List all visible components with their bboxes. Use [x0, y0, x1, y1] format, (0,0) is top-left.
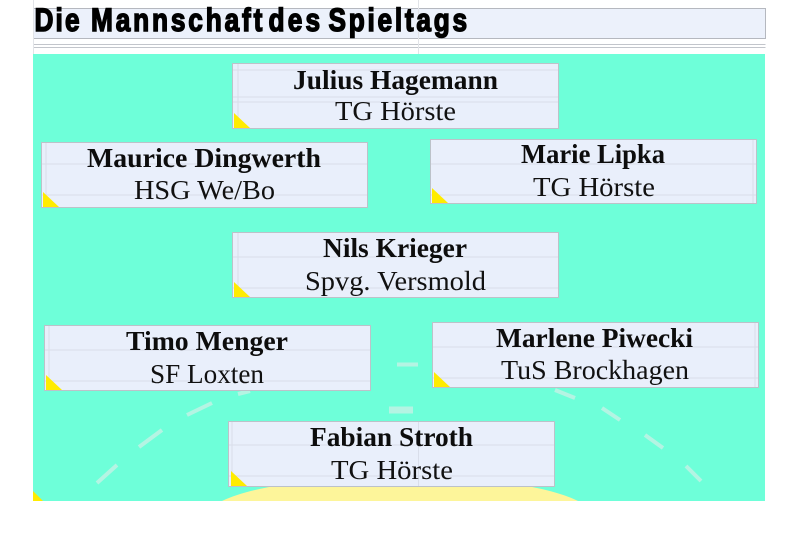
player card: Marie Lipka: TG Hörste — [533, 172, 655, 202]
icon: corner triangle — [33, 491, 43, 501]
player card: Nils Krieger: Nils Krieger — [323, 233, 467, 263]
player card: Marlene Piwecki — [432, 322, 758, 388]
player card: Maurice Dingwerth: Maurice Dingwerth — [87, 143, 321, 173]
title band — [34, 0, 766, 54]
goal area dashes — [97, 364, 701, 483]
title: Mannschaft — [91, 4, 263, 39]
title: Die — [34, 4, 80, 39]
pitch background — [33, 54, 765, 501]
title — [34, 4, 467, 39]
player card: Maurice Dingwerth: HSG We/Bo — [134, 175, 275, 205]
player card: Marie Lipka: Marie Lipka — [521, 139, 665, 169]
player card: Maurice Dingwerth — [42, 142, 368, 208]
player card: Marlene Piwecki: TuS Brockhagen — [501, 355, 690, 385]
player card: Julius Hagemann: TG Hörste — [335, 96, 456, 126]
title: Spieltags — [328, 4, 467, 39]
player card: Timo Menger: Timo Menger — [126, 326, 288, 356]
player card: Fabian Stroth — [228, 422, 554, 486]
player card: Julius Hagemann: Julius Hagemann — [293, 65, 498, 95]
player card: Marie Lipka — [430, 139, 756, 204]
player card: Fabian Stroth: TG Hörste — [331, 455, 453, 485]
player card: Timo Menger — [44, 326, 370, 390]
player card: Timo Menger: SF Loxten — [150, 359, 264, 389]
icon: yellow centre circle — [222, 476, 578, 501]
player card: Marlene Piwecki: Marlene Piwecki — [496, 323, 693, 353]
player card: Nils Krieger — [232, 232, 558, 298]
player card: Julius Hagemann — [232, 64, 558, 128]
player card: Fabian Stroth: Fabian Stroth — [310, 422, 473, 452]
player card: Nils Krieger: Spvg. Versmold — [305, 266, 487, 296]
title: des — [268, 4, 320, 39]
